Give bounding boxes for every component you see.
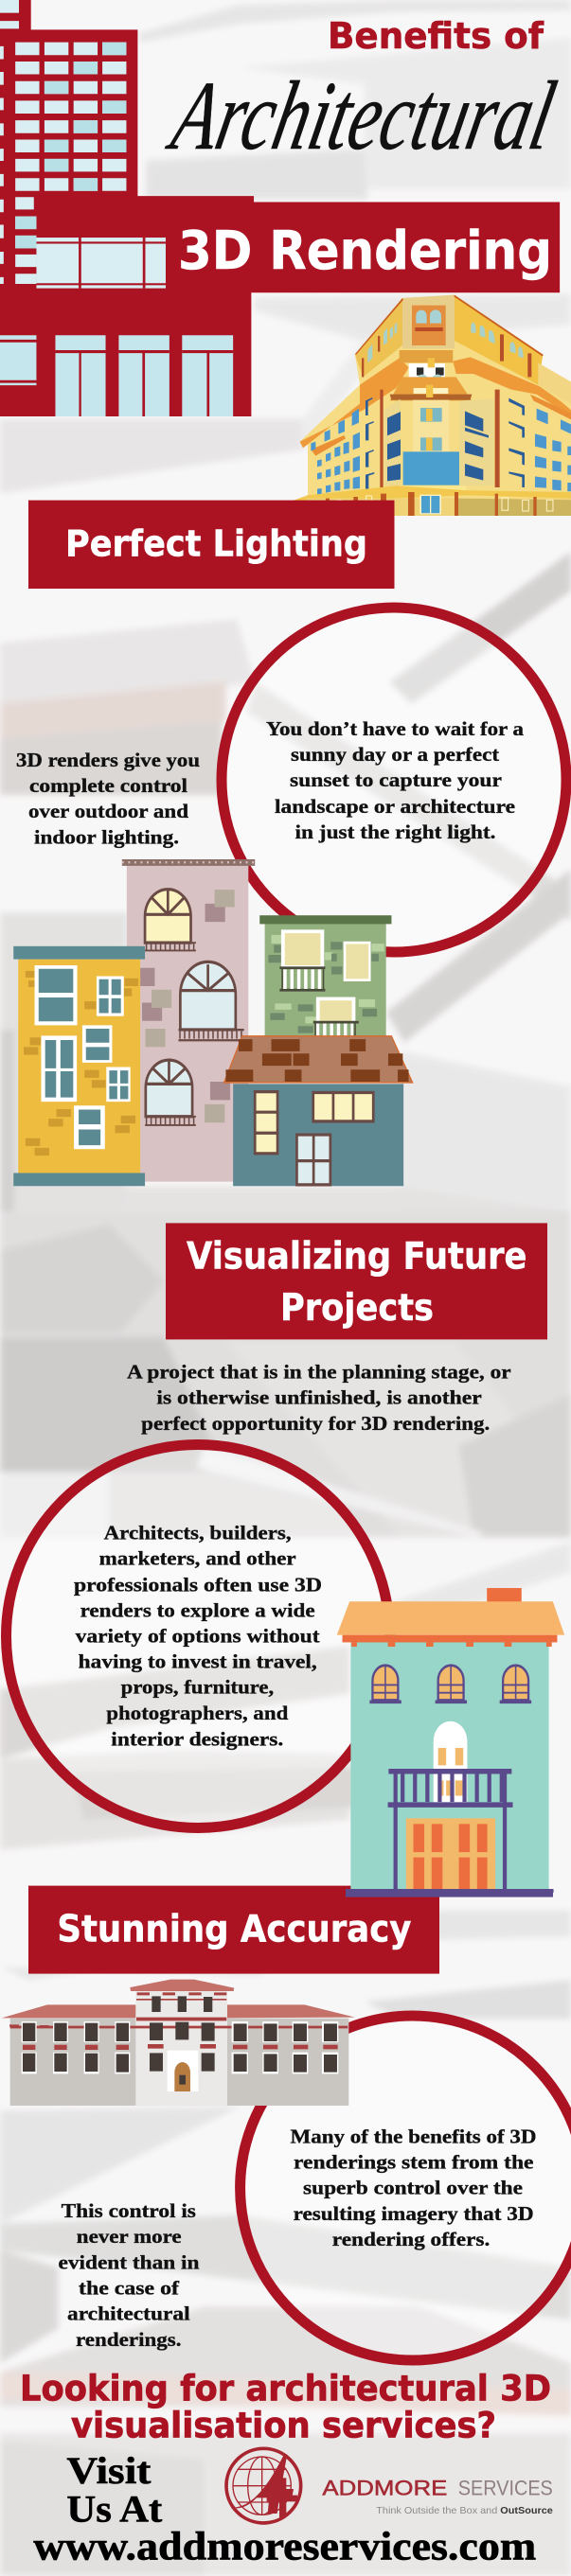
text: benefits of renderings: Many of the benefits of 3D bbox=[290, 2125, 536, 2147]
text: planning stage: A project that is in the planning stage, or bbox=[127, 1360, 511, 1383]
section heading: Stunning Accuracy: Stunning Accuracy bbox=[57, 1909, 411, 1951]
text: planning stage: perfect opportunity for 3D rendering. bbox=[141, 1412, 490, 1435]
text: architects and builders: variety of options without bbox=[76, 1624, 320, 1647]
text: sunny day: landscape or architecture bbox=[275, 795, 515, 818]
text: control evident bbox=[59, 2199, 200, 2351]
text: architects and builders: renders to explore a wide bbox=[80, 1598, 315, 1621]
panel: circle callout, superb control bbox=[241, 2016, 571, 2360]
section heading: Perfect Lighting bbox=[28, 501, 394, 589]
text: architects and builders: Architects, builders, bbox=[104, 1522, 292, 1544]
text: sunny day: sunset to capture your bbox=[290, 768, 502, 791]
text: sunny day bbox=[266, 717, 525, 843]
text: renders give control: complete control bbox=[29, 774, 187, 797]
text: sunny day: You don’t have to wait for a bbox=[266, 717, 525, 740]
call to action heading: visualisation services? bbox=[71, 2406, 496, 2445]
teal brick-roof house bbox=[224, 1036, 413, 1186]
text: visit us at: Us At bbox=[66, 2487, 163, 2530]
text: control evident: the case of bbox=[79, 2277, 180, 2300]
section heading: Perfect Lighting: Perfect Lighting bbox=[65, 522, 367, 564]
text: benefits of renderings: resulting imagery that 3D bbox=[294, 2202, 534, 2225]
logo wordmark: ADDMORE bbox=[322, 2476, 447, 2499]
call to action heading: Looking for architectural 3D bbox=[20, 2368, 551, 2408]
text: planning stage: is otherwise unfinished, is another bbox=[156, 1385, 482, 1408]
icon: long heritage building bbox=[2, 1980, 355, 2106]
text: architects and builders: photographers, and bbox=[106, 1702, 289, 1724]
panel: circle callout, perfect lighting bbox=[222, 608, 566, 952]
text: sunny day: in just the right light. bbox=[295, 820, 496, 843]
section heading: Visualizing Future Projects: Visualizing Future bbox=[187, 1236, 526, 1279]
text: control evident: never more bbox=[77, 2225, 182, 2248]
logo wordmark: SERVICES bbox=[458, 2476, 553, 2499]
section heading: Visualizing Future Projects bbox=[166, 1223, 547, 1339]
text: architects and builders: props, furniture, bbox=[121, 1676, 274, 1699]
text: control evident: This control is bbox=[62, 2199, 196, 2222]
website url: www.addmoreservices.com bbox=[33, 2525, 536, 2568]
logo wordmark bbox=[322, 2476, 553, 2516]
text: control evident: evident than in bbox=[59, 2250, 200, 2273]
house base bar bbox=[346, 1889, 553, 1897]
section heading: Visualizing Future Projects: Projects bbox=[280, 1287, 434, 1330]
text: control evident: architectural bbox=[67, 2303, 190, 2325]
text: architects and builders: marketers, and other bbox=[99, 1547, 296, 1570]
icon: row of colourful houses bbox=[13, 859, 413, 1186]
pink house bbox=[122, 859, 255, 1182]
text: renders give control: indoor lighting. bbox=[34, 825, 179, 848]
yellow house bbox=[13, 946, 145, 1186]
text: renders give control bbox=[16, 749, 200, 848]
text: control evident: renderings. bbox=[76, 2328, 182, 2351]
text: visit us at bbox=[66, 2449, 163, 2530]
text: benefits of renderings: rendering offers. bbox=[332, 2228, 490, 2250]
text: architects and builders: professionals often use 3D bbox=[74, 1573, 322, 1596]
red office building illustration bbox=[0, 0, 560, 416]
text: benefits of renderings: renderings stem from the bbox=[294, 2150, 534, 2173]
icon: yellow corner building bbox=[284, 295, 571, 520]
call to action heading bbox=[20, 2368, 551, 2445]
text: visit us at: Visit bbox=[66, 2449, 152, 2492]
text: benefits of renderings: superb control over the bbox=[303, 2177, 523, 2199]
logo: Addmore Services globe bbox=[226, 2448, 301, 2523]
text: architects and builders: having to invest in travel, bbox=[79, 1650, 317, 1673]
green house bbox=[259, 915, 391, 1038]
text: renders give control: 3D renders give you bbox=[16, 749, 200, 771]
text: benefits of renderings bbox=[290, 2125, 536, 2250]
text: architects and builders bbox=[74, 1522, 322, 1750]
text: architects and builders: interior designers. bbox=[111, 1727, 283, 1750]
text: planning stage bbox=[127, 1360, 511, 1435]
logo wordmark: Think Outside the Box and OutSource bbox=[376, 2505, 553, 2516]
section heading: Stunning Accuracy bbox=[28, 1886, 439, 1974]
title line: Benefits of: Benefits of bbox=[328, 15, 544, 57]
text: sunny day: sunny day or a perfect bbox=[291, 743, 499, 766]
text: renders give control: over outdoor and bbox=[28, 800, 188, 822]
icon: teal townhouse bbox=[337, 1588, 564, 1893]
panel: circle callout, professionals bbox=[6, 1444, 390, 1828]
title bbox=[160, 15, 564, 282]
